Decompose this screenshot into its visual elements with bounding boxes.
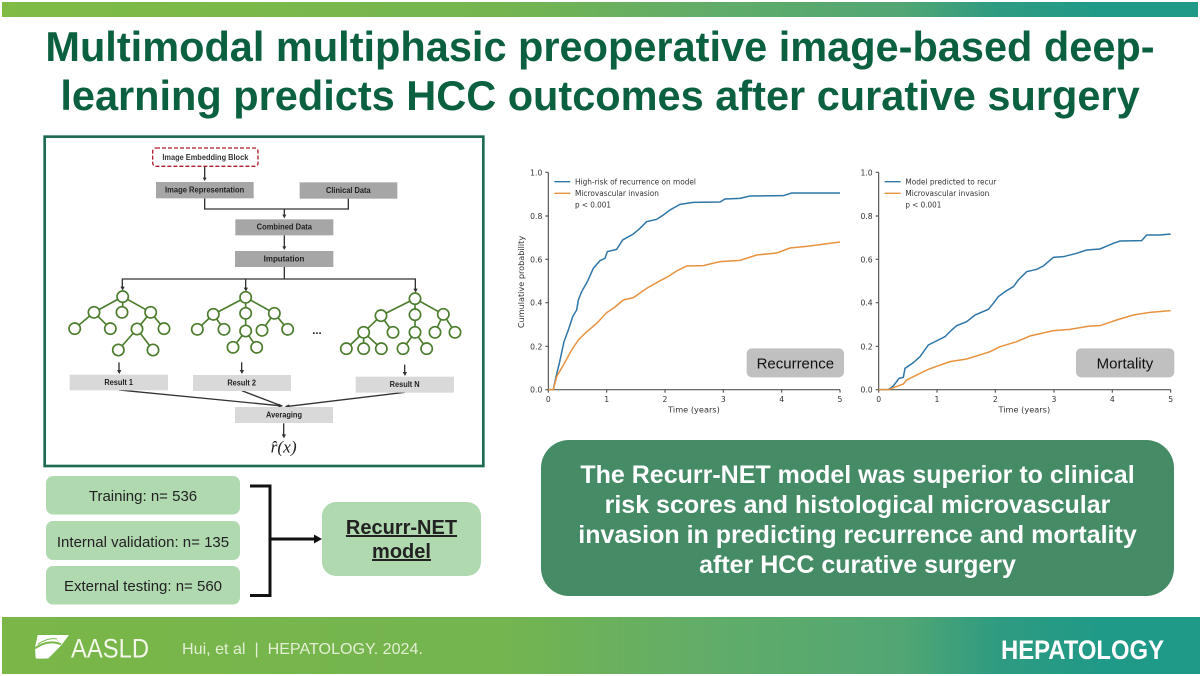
cohort box: internal validation [46,521,240,560]
diagram frame [45,137,483,466]
decision tree 2 [192,292,293,353]
recurrence label [747,348,844,377]
mortality label [1076,348,1174,377]
conclusion callout [541,440,1174,596]
chart: mortality cumulative probability [860,168,1174,415]
title: Multimodal multiphasic preoperative image-based deep- [45,23,1155,70]
panel: model flow diagram [45,137,483,466]
chart: recurrence cumulative probability [517,168,844,415]
citation: Hui, et al | HEPATOLOGY. 2024. [182,640,423,658]
recurrence tick labels: 3 [721,395,726,404]
imputation box [235,251,333,267]
imputation box: Imputation [264,255,304,264]
recurrence tick labels: 1.0 [530,168,542,177]
Recurr-NET model box [322,502,481,576]
conclusion callout: The Recurr-NET model was superior to clinical [580,461,1135,489]
mortality tick labels [860,168,1173,404]
recurrence tick labels: 5 [838,395,843,404]
cohort box: internal validation: Internal validation: n= 135 [57,534,229,551]
decision tree N [341,293,461,354]
mortality legend: Model predicted to recur [905,177,997,186]
mortality tick labels: 2 [993,395,998,404]
AASLD logo: AASLD [71,634,149,664]
conclusion callout: after HCC curative surgery [699,551,1016,579]
Recurr-NET model box: model [372,541,431,563]
output formula: r̂(x) [271,438,297,457]
recurrence x axis title: Time (years) [667,406,720,415]
mortality axes [876,172,1171,393]
recurrence legend: High-risk of recurrence on model [575,177,696,186]
recurrence legend: Microvascular invasion [575,189,659,198]
ellipsis between trees: ... [312,325,322,337]
averaging box: Averaging [266,411,302,420]
mortality tick labels: 0.4 [860,299,873,308]
mortality legend: Microvascular invasion [905,189,989,198]
mortality tick labels: 1.0 [860,168,873,177]
recurrence legend [554,177,696,209]
result N box [356,377,454,393]
recurrence tick labels: 0.2 [530,342,542,351]
combined data box: Combined Data [257,223,313,232]
recurrence tick labels: 4 [779,395,784,404]
AASLD logo [35,634,149,664]
mortality x axis title: Time (years) [997,406,1050,415]
bracket arrow to model [250,486,322,596]
clinical data box [300,182,397,199]
mortality tick labels: 0.0 [860,386,873,395]
image embedding block [153,148,258,166]
mortality blue curve [879,234,1171,390]
mortality legend: p < 0.001 [905,200,941,209]
recurrence tick labels: 0.8 [530,212,542,221]
recurrence tick labels [530,168,843,404]
conclusion callout: invasion in predicting recurrence and mortality [578,521,1137,549]
clinical data box: Clinical Data [326,186,371,195]
mortality tick labels: 4 [1110,395,1115,404]
result 2 box [193,375,291,391]
recurrence tick labels: 0.4 [530,299,542,308]
recurrence tick labels: 1 [604,395,609,404]
mortality label: Mortality [1097,356,1154,373]
mortality legend [885,177,997,209]
averaging box [235,407,333,423]
result 1 box: Result 1 [104,378,134,387]
decision tree 1 [69,291,170,356]
mortality orange curve [879,311,1171,390]
recurrence y axis title: Cumulative probability [517,235,526,328]
conclusion callout: risk scores and histological microvascular [605,491,1110,519]
cohort box: external testing [46,566,240,604]
mortality tick labels: 0.6 [860,255,873,264]
mortality tick labels: 1 [935,395,940,404]
mortality tick labels: 0.2 [860,342,873,351]
recurrence tick labels: 0.6 [530,255,542,264]
mortality tick labels: 5 [1168,395,1173,404]
recurrence legend: p < 0.001 [575,200,611,209]
mortality tick labels: 3 [1052,395,1057,404]
recurrence tick labels: 0 [546,395,551,404]
result 2 box: Result 2 [227,379,257,388]
mortality tick labels: 0 [876,395,881,404]
combined data box [235,219,333,235]
cohort box: external testing: External testing: n= 560 [64,578,222,595]
recurrence tick labels: 2 [663,395,668,404]
image representation box [156,182,254,198]
title: learning predicts HCC outcomes after curative surgery [60,72,1140,119]
flow connectors [117,167,418,438]
title [45,23,1155,119]
cohort box: training: Training: n= 536 [89,488,197,505]
recurrence orange curve [548,242,840,390]
top gradient bar [2,2,1198,17]
image representation box: Image Representation [165,186,244,195]
recurrence axes [545,172,840,393]
recurrence label: Recurrence [757,356,834,373]
result 1 box [70,375,168,390]
image embedding block: Image Embedding Block [162,153,249,162]
footer bar [2,617,1200,674]
recurrence blue curve [548,193,840,390]
cohort box: training [46,476,240,514]
mortality tick labels: 0.8 [860,212,873,221]
result N box: Result N [390,380,420,389]
recurrence tick labels: 0.0 [530,386,542,395]
Recurr-NET model box: Recurr-NET [346,517,457,539]
